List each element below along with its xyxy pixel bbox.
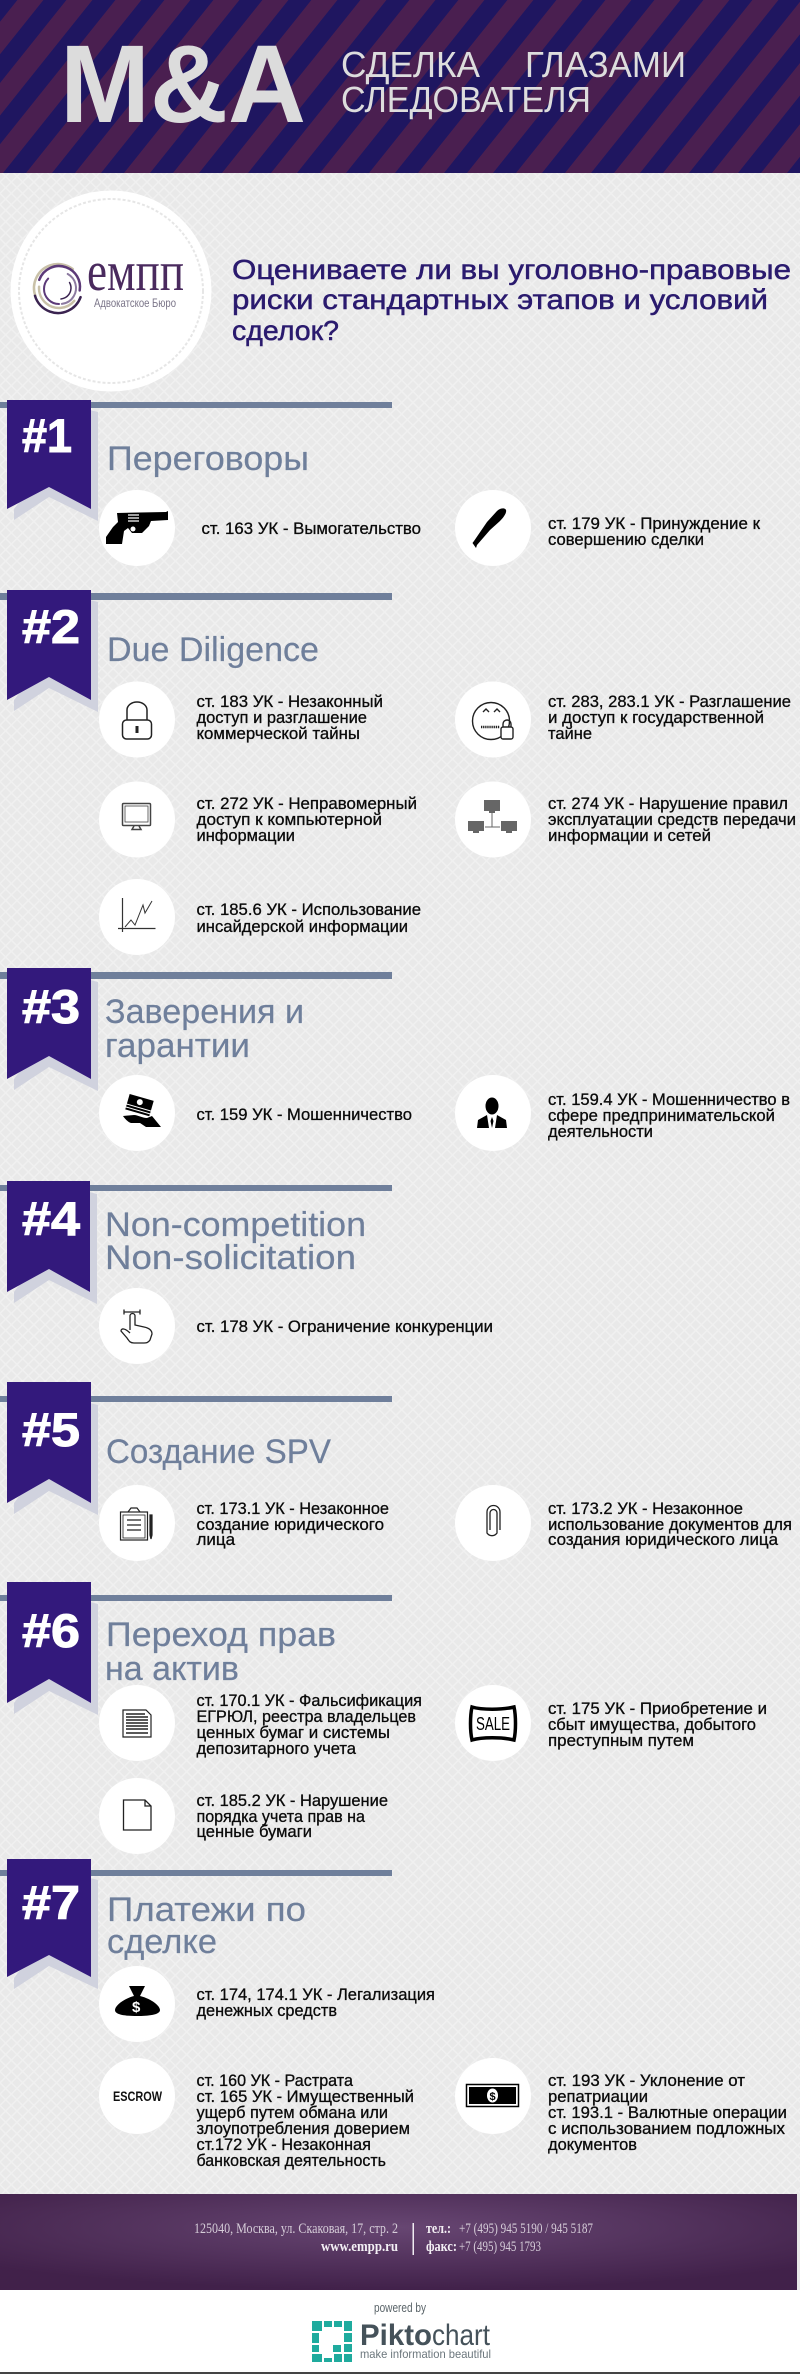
footer phones: +7 (495) 945 5190 / 945 5187 [459, 2221, 593, 2237]
ribbon #6 [0, 1582, 392, 1715]
piktochart credit [0, 2290, 800, 2374]
item: ст. 179 [548, 514, 761, 549]
heading: сделке [107, 1923, 217, 1961]
ribbon #2 [0, 590, 392, 712]
ribbon #1: #1 [22, 409, 72, 462]
heading: Платежи по [107, 1891, 306, 1929]
question text [232, 254, 791, 346]
item: ст. 175: преступным путем [548, 1731, 694, 1750]
icon: money in hand [99, 1075, 175, 1151]
item: ст. 170.1: ЕГРЮЛ, реестра владельцев [196, 1707, 416, 1726]
icon: banknote [455, 2058, 531, 2134]
heading: Переход прав [106, 1616, 336, 1654]
heading [107, 1891, 306, 1961]
ribbon #3 [0, 968, 392, 1091]
subtitle: СЛЕДОВАТЕЛЯ [341, 79, 591, 120]
heading: Non-competition [105, 1206, 366, 1244]
icon: monitor [99, 782, 175, 858]
icon: document [99, 1685, 175, 1761]
icon: blank page [99, 1778, 175, 1854]
item: ст. 283 [548, 692, 791, 743]
ribbon #4 [0, 1181, 392, 1304]
item: ст. 274: информации и сетей [548, 826, 711, 845]
heading: Создание SPV [106, 1433, 331, 1471]
item: ст. 160, 165, 172 [196, 2071, 414, 2170]
ribbon #5 [0, 1382, 392, 1515]
item: ст. 173.2: использование документов для [548, 1515, 792, 1534]
item: ст. 160, 165, 172: ст.172 УК - Незаконная [196, 2135, 371, 2154]
powered by: powered by [374, 2300, 426, 2315]
item: ст. 179: ст. 179 УК - Принуждение к [548, 514, 761, 533]
icon: paperclip [455, 1485, 531, 1561]
item: ст. 179: совершению сделки [548, 530, 704, 549]
item: ст. 193: ст. 193.1 - Валютные операции [548, 2103, 787, 2122]
item: ст. 159.4: деятельности [548, 1122, 653, 1141]
icon: money bag: $ [132, 1999, 141, 2016]
item: ст. 160, 165, 172: ст. 160 УК - Растрата [196, 2071, 354, 2090]
item: ст. 272: ст. 272 УК - Неправомерный [196, 794, 417, 813]
footer address [194, 2221, 398, 2255]
footer contact band [0, 2194, 797, 2290]
item: ст. 272 [196, 794, 417, 845]
ribbon #2: #2 [22, 600, 80, 653]
title: M&A: M&A [60, 23, 306, 146]
question text: риски стандартных этапов и условий [232, 284, 768, 315]
item: ст. 160, 165, 172: злоупотребления доверием [196, 2119, 410, 2138]
heading: на актив [105, 1650, 239, 1688]
question text: Оцениваете ли вы уголовно-правовые [232, 254, 791, 285]
item: ст. 185.2: ценные бумаги [196, 1822, 312, 1841]
item: ст. 173.1: ст. 173.1 УК - Незаконное [196, 1499, 389, 1518]
item: ст. 159.4: ст. 159.4 УК - Мошенничество в [548, 1090, 790, 1109]
footer phones: тел.: [426, 2221, 451, 2237]
item: ст. 272: информации [196, 826, 295, 845]
icon: bat [455, 490, 531, 566]
header banner [0, 0, 800, 173]
item: ст. 170.1: ценных бумаг и системы [196, 1723, 390, 1742]
logo badge [13, 193, 209, 389]
ribbon #5: #5 [22, 1403, 80, 1456]
subtitle: СДЕЛКА [341, 44, 480, 85]
icon: sale sign: SALE [476, 1714, 510, 1734]
footer address: 125040, Москва, ул. Скаковая, 17, стр. 2 [194, 2221, 398, 2237]
icon: network [455, 782, 531, 858]
item: ст. 272: доступ к компьютерной [196, 810, 382, 829]
item: ст. 163: ст. 163 УК - Вымогательство [202, 519, 421, 538]
heading: Заверения и [105, 993, 304, 1031]
heading [105, 1616, 336, 1688]
heading: Due Diligence [107, 631, 319, 669]
panel: section 7 [0, 1859, 787, 2170]
item: ст. 160, 165, 172: ущерб путем обмана или [196, 2103, 388, 2122]
icon: revolver [99, 490, 175, 566]
subtitle: ГЛАЗАМИ [525, 44, 686, 85]
item: ст. 193: репатриации [548, 2087, 648, 2106]
icon: zipped face [455, 682, 531, 758]
item: ст. 185.6 [196, 900, 421, 936]
question text: сделок? [232, 315, 339, 346]
piktochart wordmark: chart [432, 2319, 491, 2352]
item: ст. 185.6: ст. 185.6 УК - Использование [196, 900, 421, 919]
item: ст. 183: коммерческой тайны [196, 724, 360, 743]
icon: escrow: ESCROW [113, 2088, 163, 2104]
heading [105, 1206, 366, 1277]
item: ст. 174: ст. 174, 174.1 УК - Легализация [196, 1985, 435, 2004]
item: ст. 170.1: депозитарного учета [196, 1739, 357, 1758]
icon: businessman [455, 1075, 531, 1151]
piktochart wordmark: Pikto [360, 2319, 432, 2352]
footer divider [412, 2223, 414, 2255]
item: ст. 170.1 [196, 1691, 422, 1758]
item: ст. 193 [548, 2071, 787, 2154]
panel: section 3 [0, 968, 790, 1151]
item: ст. 274: ст. 274 УК - Нарушение правил [548, 794, 788, 813]
item: ст. 173.1: лица [196, 1530, 236, 1549]
item: ст. 174 [196, 1985, 435, 2020]
icon: line chart [99, 879, 175, 955]
item: ст. 175: сбыт имущества, добытого [548, 1715, 756, 1734]
item: ст. 274: эксплуатации средств передачи [548, 810, 796, 829]
item: ст. 193: с использованием подложных [548, 2119, 785, 2138]
item: ст. 173.1: создание юридического [196, 1515, 384, 1534]
logo wordmark: емпп [87, 241, 184, 303]
item: ст. 159: ст. 159 УК - Мошенничество [196, 1105, 412, 1124]
ribbon #1 [0, 400, 392, 521]
ribbon #7: #7 [22, 1876, 80, 1929]
panel: section 4 [0, 1181, 493, 1364]
item: ст. 178: ст. 178 УК - Ограничение конкуренции [196, 1317, 493, 1336]
item: ст. 173.2: ст. 173.2 УК - Незаконное [548, 1499, 743, 1518]
icon: escrow [99, 2058, 175, 2134]
bottom rule [0, 2372, 800, 2374]
item: ст. 283: ст. 283, 283.1 УК - Разглашение [548, 692, 791, 711]
ribbon #7 [0, 1859, 392, 1989]
footer address: www.empp.ru [321, 2239, 398, 2255]
footer phones [426, 2221, 593, 2255]
icon: pointer hand [99, 1288, 175, 1364]
item: ст. 159.4 [548, 1090, 790, 1141]
piktochart wordmark [360, 2319, 491, 2352]
item: ст. 193: ст. 193 УК - Уклонение от [548, 2071, 745, 2090]
ribbon #4: #4 [22, 1192, 80, 1245]
icon: sale sign [455, 1685, 531, 1761]
ribbon #3: #3 [22, 980, 80, 1033]
item: ст. 183: ст. 183 УК - Незаконный [196, 692, 383, 711]
item: ст. 183 [196, 692, 383, 743]
heading [105, 993, 304, 1065]
icon: lock [99, 682, 175, 758]
logo tagline: Адвокатское Бюро [94, 296, 176, 310]
item: ст. 283: и доступ к государственной [548, 708, 764, 727]
footer phones: факс: [426, 2239, 457, 2255]
heading: Non-solicitation [105, 1239, 356, 1277]
item: ст. 159.4: сфере предпринимательской [548, 1106, 775, 1125]
item: ст. 193: документов [548, 2135, 637, 2154]
item: ст. 173.1 [196, 1499, 389, 1549]
heading: Переговоры [107, 440, 309, 478]
item: ст. 274 [548, 794, 796, 845]
item: ст. 175 [548, 1699, 767, 1750]
subtitle [341, 44, 686, 120]
ribbon #6: #6 [22, 1604, 80, 1657]
item: ст. 185.2: ст. 185.2 УК - Нарушение [196, 1791, 388, 1810]
icon: clipboard [99, 1485, 175, 1561]
item: ст. 185.6: инсайдерской информации [196, 917, 408, 936]
icon: money bag [99, 1966, 175, 2042]
heading: гарантии [105, 1027, 250, 1065]
item: ст. 283: тайне [548, 724, 592, 743]
panel: section 6 [0, 1582, 767, 1854]
item: ст. 173.2: создания юридического лица [548, 1530, 779, 1549]
item: ст. 174: денежных средств [196, 2001, 337, 2020]
logo emblem: spiral [27, 257, 89, 320]
item: ст. 175: ст. 175 УК - Приобретение и [548, 1699, 767, 1718]
item: ст. 173.2 [548, 1499, 792, 1549]
icon: banknote: $ [490, 2091, 496, 2103]
panel: section 1 [0, 400, 761, 566]
panel: section 5 [0, 1382, 792, 1561]
item: ст. 183: доступ и разглашение [196, 708, 367, 727]
item: ст. 170.1: ст. 170.1 УК - Фальсификация [196, 1691, 422, 1710]
panel: section 2 [0, 590, 796, 955]
item: ст. 160, 165, 172: банковская деятельность [196, 2151, 386, 2170]
footer phones: +7 (495) 945 1793 [459, 2239, 541, 2255]
item: ст. 160, 165, 172: ст. 165 УК - Имущественный [196, 2087, 414, 2106]
piktochart tagline: make information beautiful [360, 2347, 491, 2361]
icon: piktochart logo [312, 2321, 352, 2362]
item: ст. 185.2 [196, 1791, 388, 1841]
item: ст. 185.2: порядка учета прав на [196, 1807, 366, 1826]
